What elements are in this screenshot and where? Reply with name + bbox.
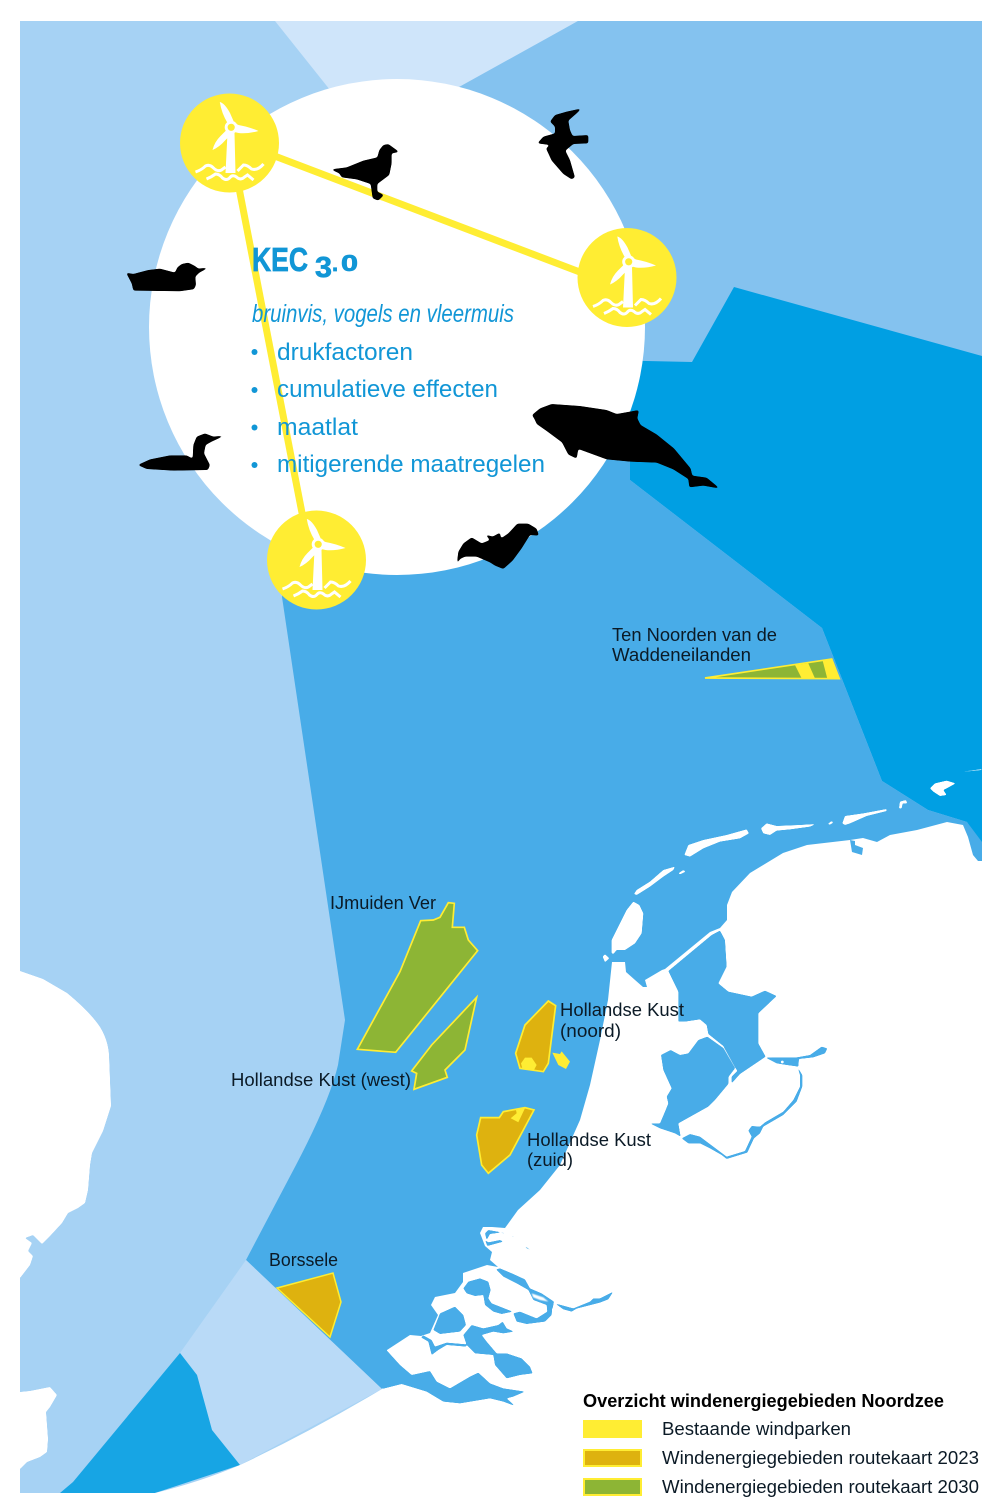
sea zone: upper right xyxy=(450,21,982,370)
label: Hollandse Kust noord: (noord) xyxy=(560,1021,621,1041)
label: Hollandse Kust noord xyxy=(560,1000,684,1041)
connection lines between wind parks xyxy=(239,155,585,518)
bullet list: cumulatieve effecten xyxy=(277,376,498,403)
land: Netherlands mainland xyxy=(155,822,1000,1511)
wind area: IJmuiden Ver xyxy=(357,903,478,1052)
label: IJmuiden Ver: IJmuiden Ver xyxy=(330,893,436,913)
label: Hollandse Kust noord: Hollandse Kust xyxy=(560,1000,684,1020)
bullet list: mitigerende maatregelen xyxy=(277,451,545,478)
water: Lauwersmeer xyxy=(850,840,863,855)
land: Ketelmeer islet xyxy=(781,1061,784,1063)
icon: diver xyxy=(138,433,225,471)
legend item: roadmap 2023: Windenergiegebieden routekaart 2023 xyxy=(662,1448,979,1468)
icon: offshore wind turbine 3 xyxy=(267,510,366,610)
icon: bat xyxy=(457,524,539,569)
label: Hollandse Kust zuid: Hollandse Kust xyxy=(527,1130,651,1150)
water: IJsselmeer, Markermeer and Flevoland rim xyxy=(650,931,827,1159)
wind area: Borssele xyxy=(277,1273,341,1337)
label: Ten Noorden van de Waddeneilanden xyxy=(612,625,777,665)
icon: swimming bird xyxy=(126,263,209,291)
icon: porpoise xyxy=(532,404,720,489)
icon: gull xyxy=(331,144,399,201)
sea zone: Dutch EEZ xyxy=(246,400,982,1420)
white circle xyxy=(149,79,645,575)
subheading: bruinvis, vogels en vleermuis xyxy=(252,300,514,328)
bullet list xyxy=(252,339,545,478)
land: Wadden islands and Helgoland xyxy=(603,769,982,962)
legend item: roadmap 2030: Windenergiegebieden routekaart 2030 xyxy=(662,1477,979,1497)
legend xyxy=(583,1391,979,1497)
sea zone: German dark blue xyxy=(600,287,982,850)
sea zone: top wedge xyxy=(275,21,578,90)
label: Borssele: Borssele xyxy=(269,1250,338,1270)
icon: offshore wind turbine 2 xyxy=(578,228,676,327)
sea zone: Belgium xyxy=(180,1260,382,1465)
wind area: Hollandse Kust west xyxy=(412,997,477,1089)
land: United Kingdom xyxy=(20,971,111,1469)
heading: KEC 3.0: 0 xyxy=(341,250,358,276)
heading: KEC 3.0: . xyxy=(332,251,338,276)
bullet list: drukfactoren xyxy=(277,339,413,366)
water: Zeeland and Zuid-Holland delta xyxy=(382,1230,613,1406)
icon: flying bird xyxy=(537,108,588,179)
wind area: Hollandse Kust zuid xyxy=(477,1108,534,1173)
sea zone: lower dark xyxy=(60,1353,240,1493)
legend item: existing xyxy=(583,1419,851,1439)
label: Hollandse Kust zuid xyxy=(527,1130,651,1170)
wind area: Hollandse Kust noord xyxy=(516,1001,570,1072)
label: Hollandse Kust west: Hollandse Kust (west) xyxy=(231,1070,411,1090)
heading: KEC 3.0: KEC xyxy=(252,241,308,278)
label: Ten Noorden van de Waddeneilanden: Waddeneilanden xyxy=(612,645,751,665)
label: Hollandse Kust zuid: (zuid) xyxy=(527,1150,573,1170)
heading: KEC 3.0: 3 xyxy=(315,252,332,284)
wind area: Ten Noorden van de Waddeneilanden xyxy=(705,658,840,679)
heading: KEC 3.0 xyxy=(252,241,358,284)
legend item: existing: Bestaande windparken xyxy=(662,1419,851,1439)
legend title: Overzicht windenergiegebieden Noordzee xyxy=(583,1391,944,1411)
bullet list: maatlat xyxy=(277,414,358,441)
label: Ten Noorden van de Waddeneilanden: Ten Noorden van de xyxy=(612,625,777,645)
icon: offshore wind turbine 1 xyxy=(180,94,279,192)
